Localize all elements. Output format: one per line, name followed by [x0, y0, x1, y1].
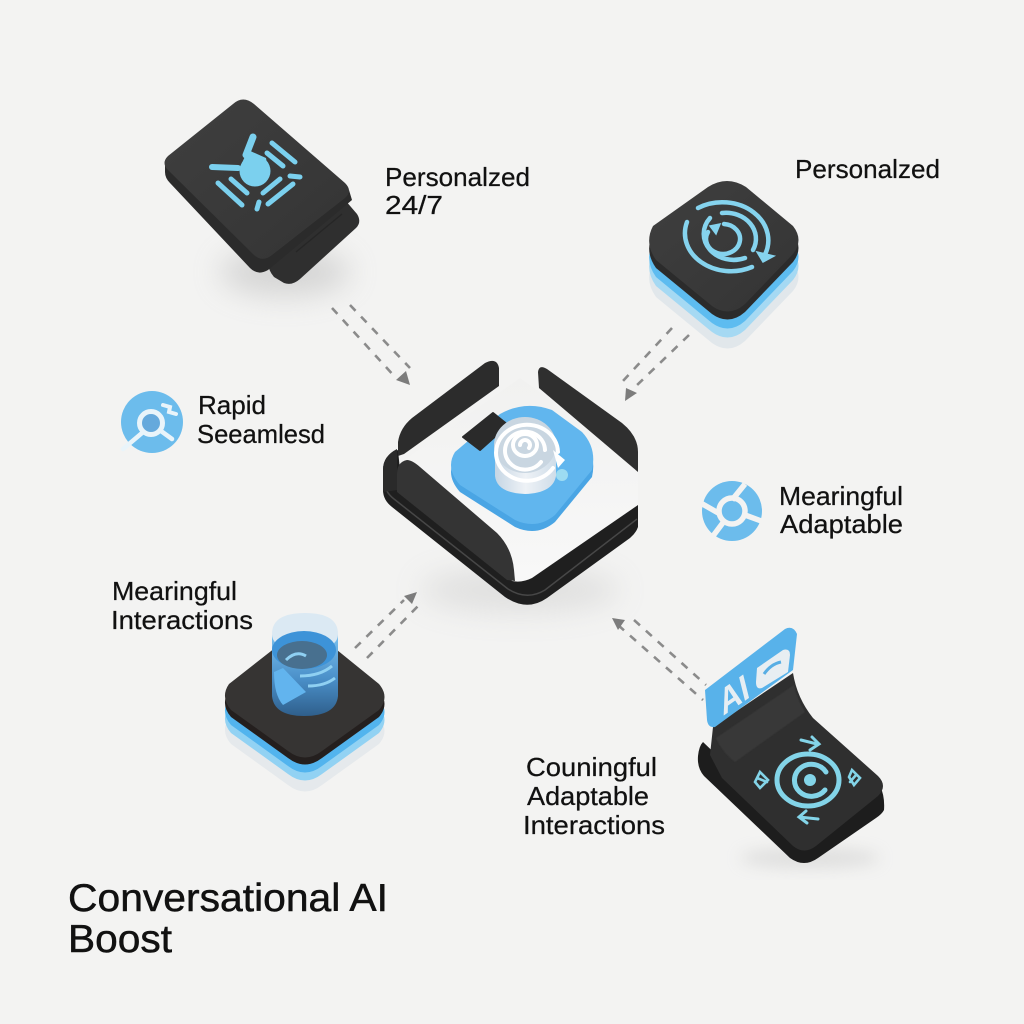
device: bottom-left glass cylinder tile: [225, 613, 384, 792]
label: Mearingful Interactions: Interactions: [111, 605, 253, 635]
stand base: [698, 742, 884, 863]
label: Personalzed: Personalzed: [795, 154, 940, 184]
hub front wall: [397, 460, 515, 581]
arrow: top-left to hub: [332, 305, 410, 385]
label: Mearingful Interactions: Mearingful: [112, 576, 237, 606]
label: Couningful Adaptable Interactions: Adaptable: [527, 781, 649, 811]
label: Personalzed 24/7: 24/7: [385, 190, 443, 220]
device: top-right ring tile: [649, 181, 798, 349]
label: Couningful Adaptable Interactions: Couningful: [526, 752, 657, 782]
hub back walls: [398, 361, 499, 456]
label: Rapid Seeamlesd: [197, 390, 325, 449]
hub dark tag: [463, 413, 508, 450]
device: bottom-right folded stand: [698, 628, 884, 868]
hub cup with spiral: [494, 417, 568, 494]
central hub device: [383, 361, 638, 612]
label: Personalzed 24/7: Personalzed: [385, 162, 530, 192]
label: Rapid Seeamlesd: Seeamlesd: [197, 419, 325, 449]
hub base: [383, 450, 638, 605]
stand sheet: [710, 673, 883, 850]
label: Mearingful Adaptable: [779, 481, 903, 539]
icon: chip glyph: [212, 137, 300, 209]
label: Mearingful Adaptable: Mearingful: [779, 481, 903, 511]
arrow: bottom-right to hub: [612, 618, 706, 700]
hub white plate: [400, 378, 638, 582]
icon: concentric arrows: [685, 202, 774, 271]
icon: segmented target badge: [699, 481, 764, 541]
icon: circular control glyph: [755, 737, 860, 823]
hub blue pad: [451, 413, 593, 531]
title: Boost: [68, 918, 172, 961]
title: Conversational AI: [68, 877, 388, 920]
stand blue sign: AI: [716, 667, 753, 724]
label: Mearingful Adaptable: Adaptable: [780, 509, 903, 539]
arrow: bottom-left to hub: [355, 592, 420, 658]
label: Personalzed 24/7: [385, 162, 530, 220]
label: Couningful Adaptable Interactions: Interactions: [523, 810, 665, 840]
label: Couningful Adaptable Interactions: [523, 752, 665, 840]
title: [68, 877, 388, 961]
stand blue sign: [705, 628, 797, 727]
icon: magnifier badge: [121, 391, 183, 453]
device: top-left chip: [164, 100, 359, 296]
arrow: top-right to hub: [622, 328, 689, 401]
icon: glass cylinder: [272, 613, 338, 716]
label: Mearingful Interactions: [111, 576, 253, 635]
chip tab: [268, 200, 359, 284]
label: Rapid Seeamlesd: Rapid: [198, 390, 266, 420]
